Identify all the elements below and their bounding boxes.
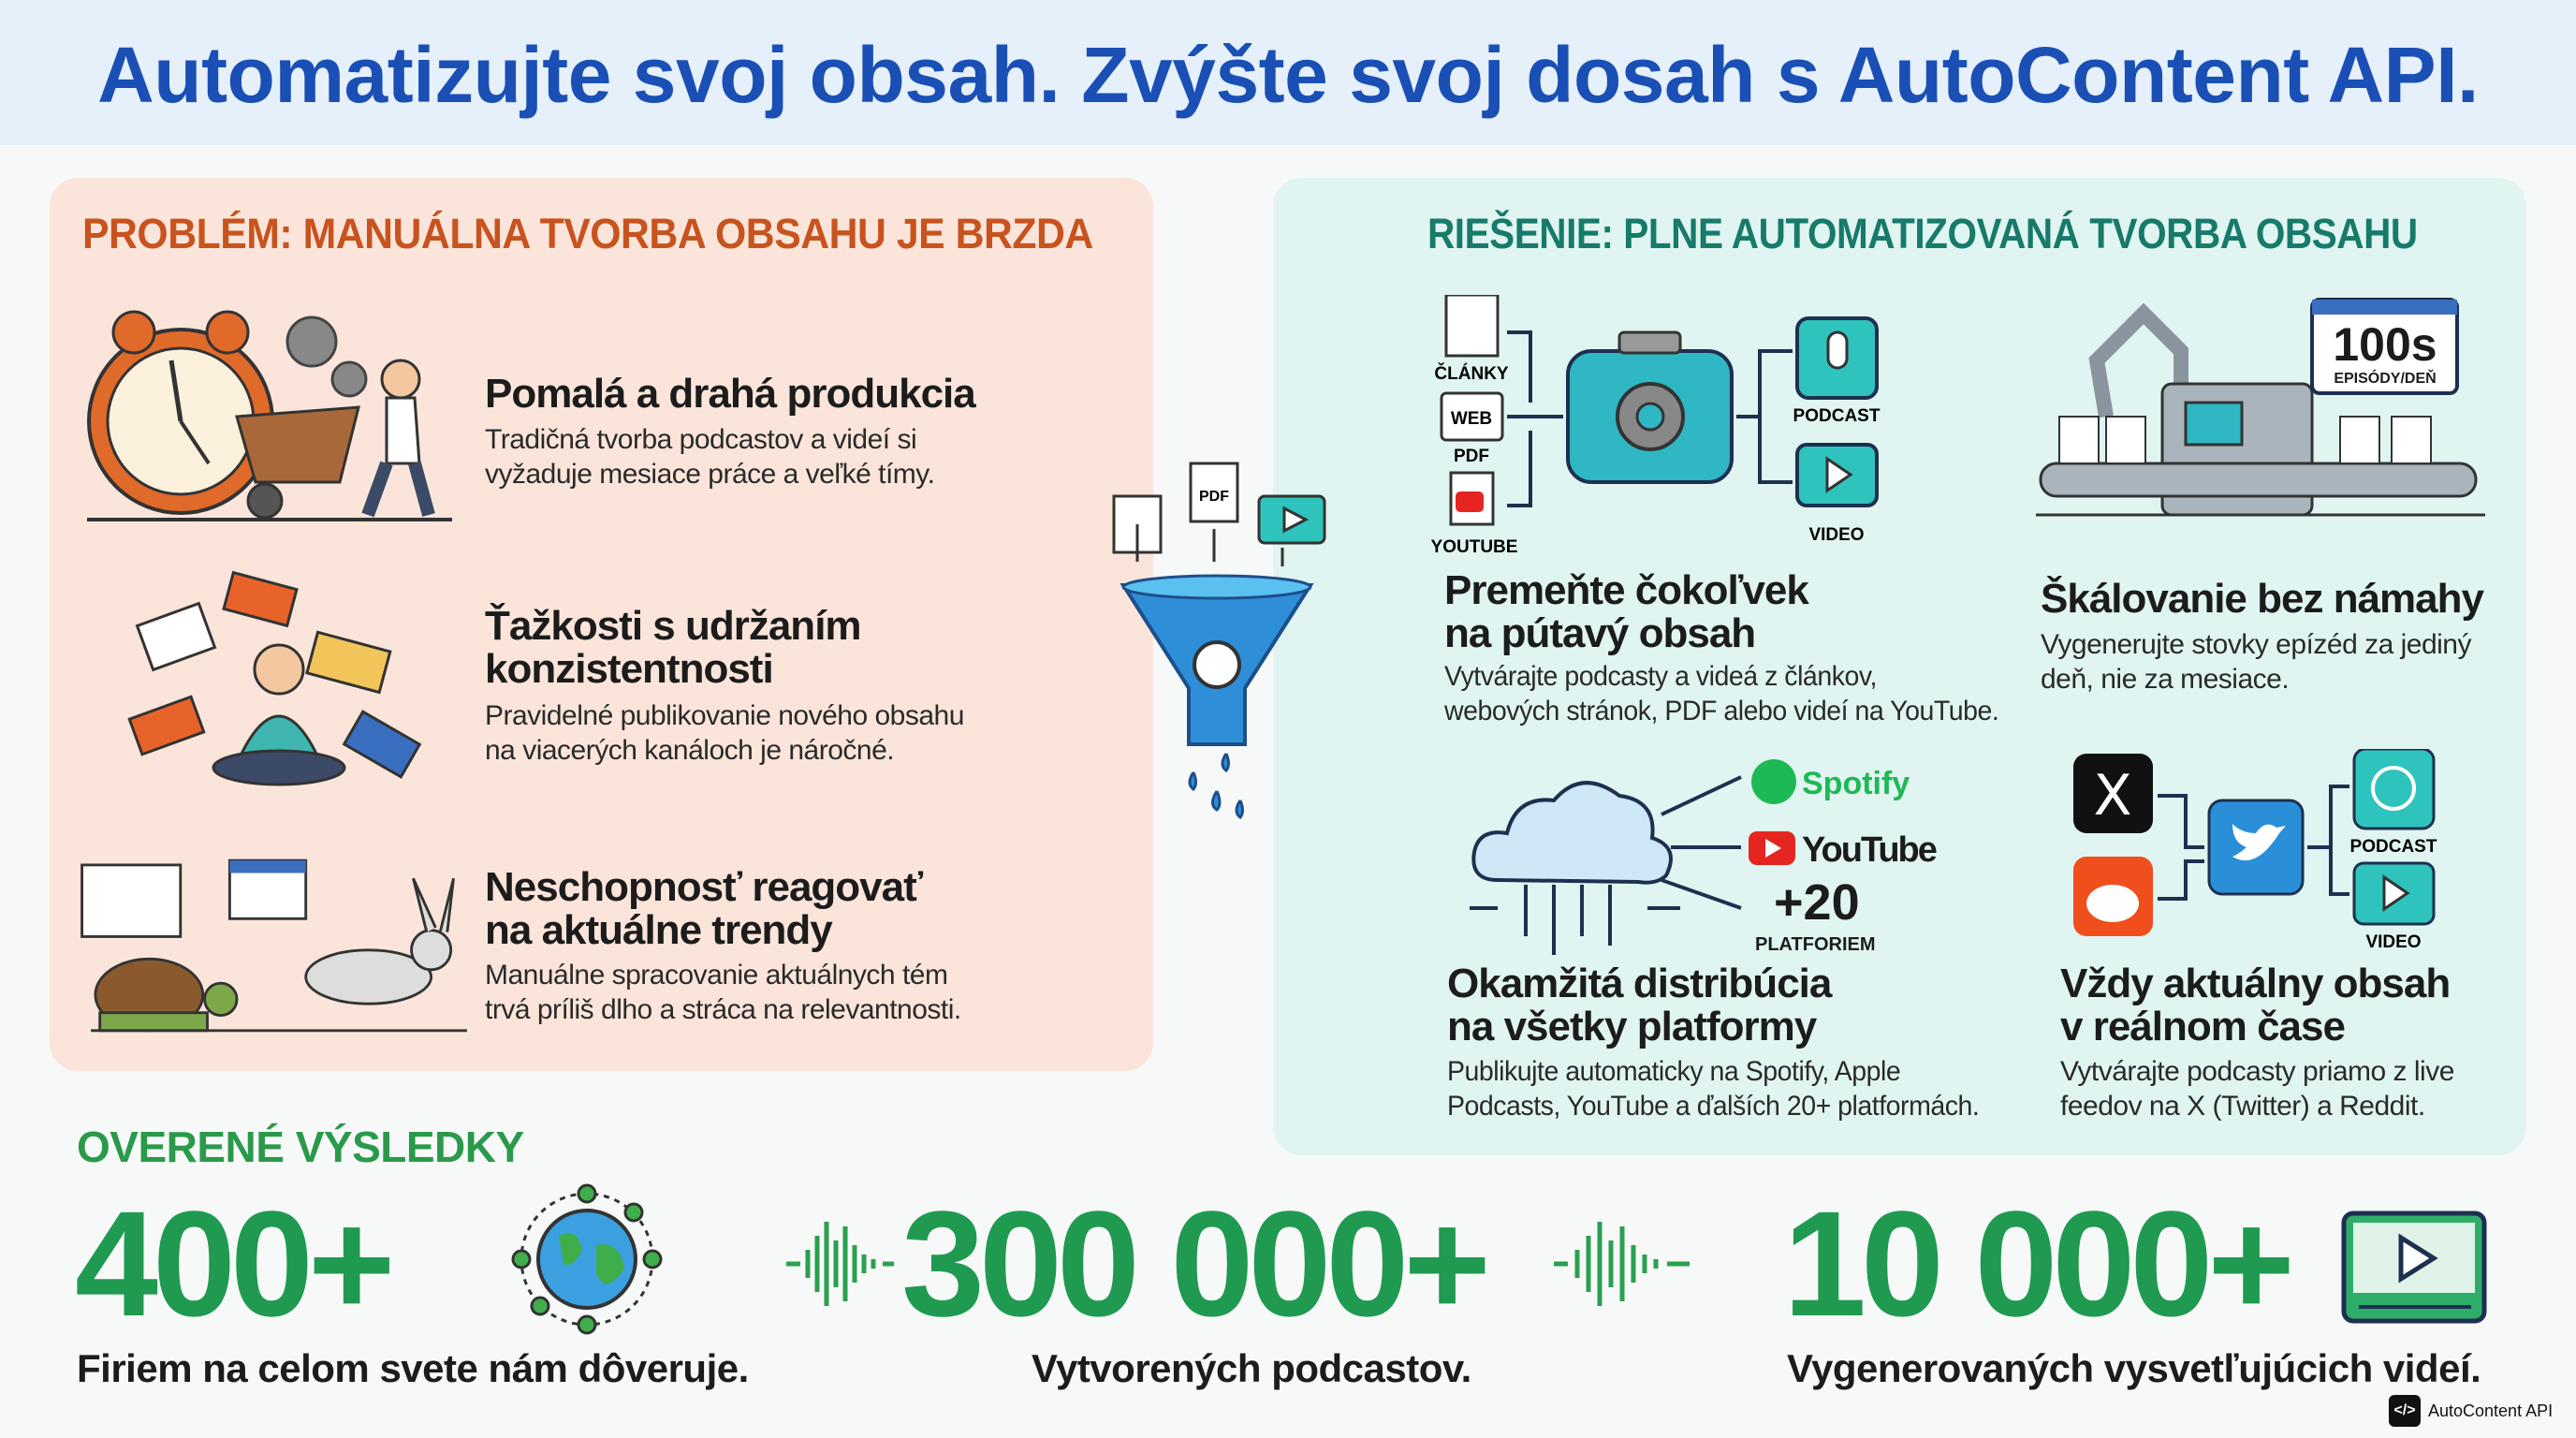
item 2 title: konzistentnosti	[485, 646, 773, 692]
q1 title	[1444, 567, 1809, 656]
icon: conversion engine: WEB	[1451, 409, 1492, 429]
icon: conversion engine: PDF	[1454, 447, 1489, 466]
item 1 desc: Tradičná tvorba podcastov a videí si	[485, 424, 916, 455]
q2 desc: Vygenerujte stovky epízéd za jediný	[2041, 629, 2471, 660]
stat 2 label: Vytvorených podcastov.	[1032, 1346, 1471, 1390]
icon: realtime feeds: PODCAST	[2350, 837, 2437, 857]
panel: problem	[50, 178, 1153, 1071]
icon: realtime feeds	[2073, 749, 2437, 950]
icon: cloud distribution: YouTube	[1802, 830, 1937, 870]
icon: cloud distribution	[1470, 759, 1937, 955]
icon: waveform right	[1554, 1222, 1690, 1306]
item 2 desc	[485, 700, 964, 766]
item 1 desc: vyžaduje mesiace práce a veľké tímy.	[485, 459, 934, 490]
icon: waveform left	[786, 1222, 894, 1306]
q1 desc	[1444, 661, 1998, 726]
item 2 title	[485, 603, 861, 692]
q2 desc: deň, nie za mesiace.	[2041, 664, 2289, 695]
icon: video player	[2342, 1211, 2486, 1324]
icon: globe	[511, 1183, 663, 1335]
q4 title	[2060, 961, 2450, 1049]
stat 3: 10 000+	[1783, 1180, 2290, 1347]
q3 title: na všetky platformy	[1447, 1004, 1816, 1049]
icon: cloud distribution: +20	[1774, 874, 1860, 931]
stat 3	[1783, 1180, 2486, 1390]
q3 desc: Podcasts, YouTube a ďalších 20+ platformách.	[1447, 1091, 1979, 1122]
q4 desc	[2060, 1056, 2454, 1122]
stat 2	[786, 1180, 1690, 1390]
item 1 title: Pomalá a drahá produkcia	[485, 371, 975, 417]
item 3 title	[485, 864, 923, 953]
item 2 title: Ťažkosti s udržaním	[485, 603, 861, 649]
stat 3 label: Vygenerovaných vysvetľujúcich videí.	[1787, 1346, 2481, 1390]
badge: AutoContent API	[2389, 1395, 2553, 1427]
q4 title: Vždy aktuálny obsah	[2060, 961, 2450, 1006]
q3 title: Okamžitá distribúcia	[1447, 961, 1831, 1006]
title: Automatizujte svoj obsah. Zvýšte svoj dosah s AutoContent API.	[97, 31, 2479, 119]
q4 desc: feedov na X (Twitter) a Reddit.	[2060, 1091, 2425, 1122]
panel: solution	[1273, 178, 2526, 1155]
icon: realtime feeds: X	[2093, 763, 2132, 829]
icon: juggling person	[127, 571, 421, 786]
solution heading: RIEŠENIE: PLNE AUTOMATIZOVANÁ TVORBA OBSAHU	[1427, 210, 2418, 257]
q3 title	[1447, 961, 1833, 1049]
q4 title: v reálnom čase	[2060, 1004, 2345, 1049]
q1 title: na pútavý obsah	[1444, 610, 1755, 656]
icon: factory: 100s	[2333, 318, 2437, 371]
badge: AutoContent API: </>	[2393, 1402, 2416, 1418]
item 2 desc: na viacerých kanáloch je náročné.	[485, 735, 894, 766]
q1 desc: Vytvárajte podcasty a videá z článkov,	[1444, 661, 1877, 692]
item 3 desc: Manuálne spracovanie aktuálnych tém	[485, 960, 947, 990]
q4 desc: Vytvárajte podcasty priamo z live	[2060, 1056, 2454, 1087]
icon: conversion engine: YOUTUBE	[1431, 537, 1517, 557]
q3 desc	[1447, 1056, 1979, 1122]
item 2 desc: Pravidelné publikovanie nového obsahu	[485, 700, 964, 731]
item 3 desc	[485, 960, 961, 1025]
stat 1	[75, 1180, 749, 1390]
icon: conversion engine	[1430, 295, 1881, 557]
header band	[0, 0, 2576, 145]
icon: conversion engine: PODCAST	[1793, 406, 1881, 426]
q1 title: Premeňte čokoľvek	[1444, 567, 1808, 613]
q1 desc: webových stránok, PDF alebo videí na YouTube.	[1444, 696, 1998, 726]
icon: funnel: PDF	[1199, 489, 1229, 505]
icon: cloud distribution: PLATFORIEM	[1755, 934, 1876, 955]
badge: AutoContent API: AutoContent API	[2428, 1401, 2553, 1419]
icon: cloud distribution: Spotify	[1802, 766, 1910, 801]
item 3 title: Neschopnosť reagovať	[485, 864, 922, 910]
icon: conversion engine: VIDEO	[1808, 525, 1865, 545]
item 1 desc	[485, 424, 934, 490]
results heading: OVERENÉ VÝSLEDKY	[77, 1123, 524, 1171]
item 3 title: na aktuálne trendy	[485, 907, 832, 953]
icon: factory: EPISÓDY/DEŇ	[2334, 369, 2437, 387]
q2 title: Škálovanie bez námahy	[2041, 576, 2483, 622]
item 3 desc: trvá príliš dlho a stráca na relevantnosti.	[485, 994, 961, 1025]
icon: factory	[2036, 298, 2485, 517]
icon: clock and wheelbarrow	[87, 311, 452, 521]
stat 1: 400+	[75, 1180, 389, 1347]
problem heading: PROBLÉM: MANUÁLNA TVORBA OBSAHU JE BRZDA	[82, 210, 1093, 257]
stat 1 label: Firiem na celom svete nám dôveruje.	[77, 1346, 749, 1390]
icon: conversion engine: ČLÁNKY	[1434, 363, 1509, 384]
stat 2: 300 000+	[901, 1180, 1486, 1347]
icon: funnel	[1112, 462, 1325, 819]
q2 desc	[2041, 629, 2471, 695]
icon: turtle and rabbit	[80, 859, 467, 1032]
q3 desc: Publikujte automaticky na Spotify, Apple	[1447, 1056, 1900, 1087]
